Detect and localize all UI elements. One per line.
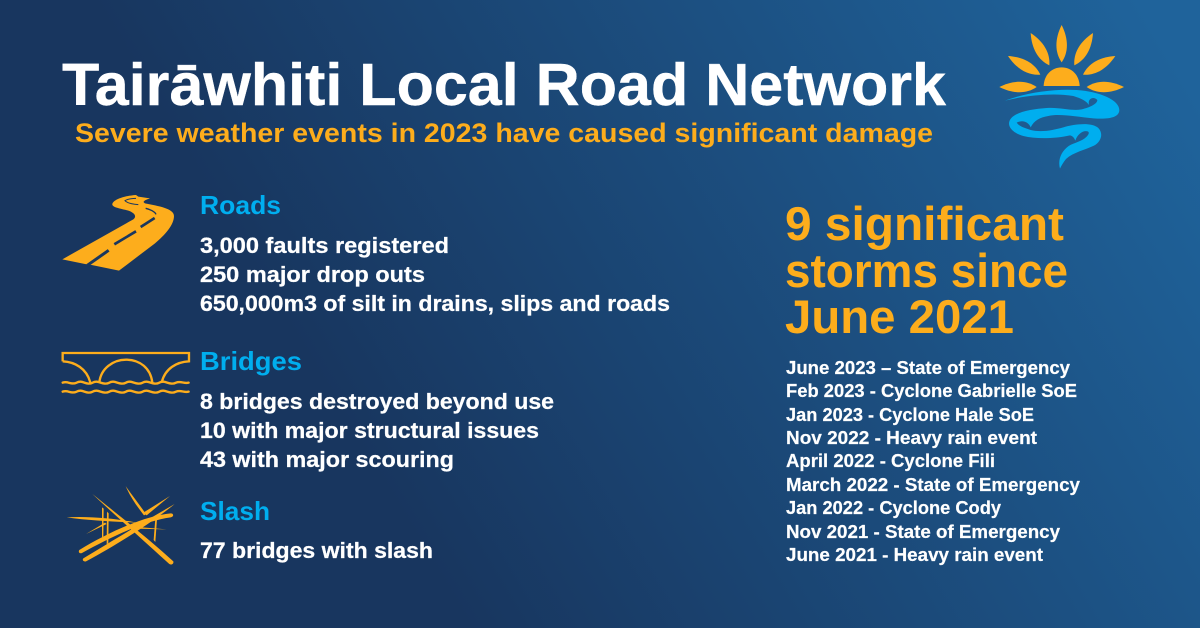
text block: storm list: June 2023 – State of Emergency [786,358,1070,378]
icon: road [62,195,174,271]
text block: roads facts: 650,000m3 of silt in drains, slips and roads [200,291,670,316]
text block: slash facts: 77 bridges with slash [200,538,433,563]
headline: storm count: 9 significant [785,197,1064,250]
headline: storm count [785,197,1068,343]
text block: roads facts [200,233,670,316]
icon: bridge [63,353,189,393]
text block: storm list: Feb 2023 - Cyclone Gabrielle SoE [786,381,1077,401]
text block: storm list: Nov 2022 - Heavy rain event [786,428,1037,448]
text block: bridges facts: 8 bridges destroyed beyond use [200,389,554,414]
headline: storm count: June 2021 [785,290,1014,343]
title: Tairāwhiti Local Road Network [62,52,946,118]
text block: storm list [786,358,1080,565]
heading: bridges: Bridges [200,346,302,376]
text block: bridges facts: 43 with major scouring [200,447,454,472]
text block: storm list: Jan 2022 - Cyclone Cody [786,498,1001,518]
text block: storm list: Jan 2023 - Cyclone Hale SoE [786,405,1034,425]
text block: storm list: April 2022 - Cyclone Fili [786,451,995,471]
icon: sun and river logo [999,25,1124,169]
text block: bridges facts: 10 with major structural issues [200,418,539,443]
text block: storm list: Nov 2021 - State of Emergency [786,522,1060,542]
icon: slash [67,486,175,565]
heading: roads: Roads [200,190,281,220]
text block: storm list: March 2022 - State of Emergency [786,475,1080,495]
text block: roads facts: 250 major drop outs [200,262,425,287]
subtitle: Severe weather events in 2023 have caused significant damage [75,118,933,148]
heading: slash: Slash [200,496,270,526]
text block: roads facts: 3,000 faults registered [200,233,449,258]
text block: storm list: June 2021 - Heavy rain event [786,545,1043,565]
headline: storm count: storms since [785,244,1068,297]
text block: bridges facts [200,389,554,472]
